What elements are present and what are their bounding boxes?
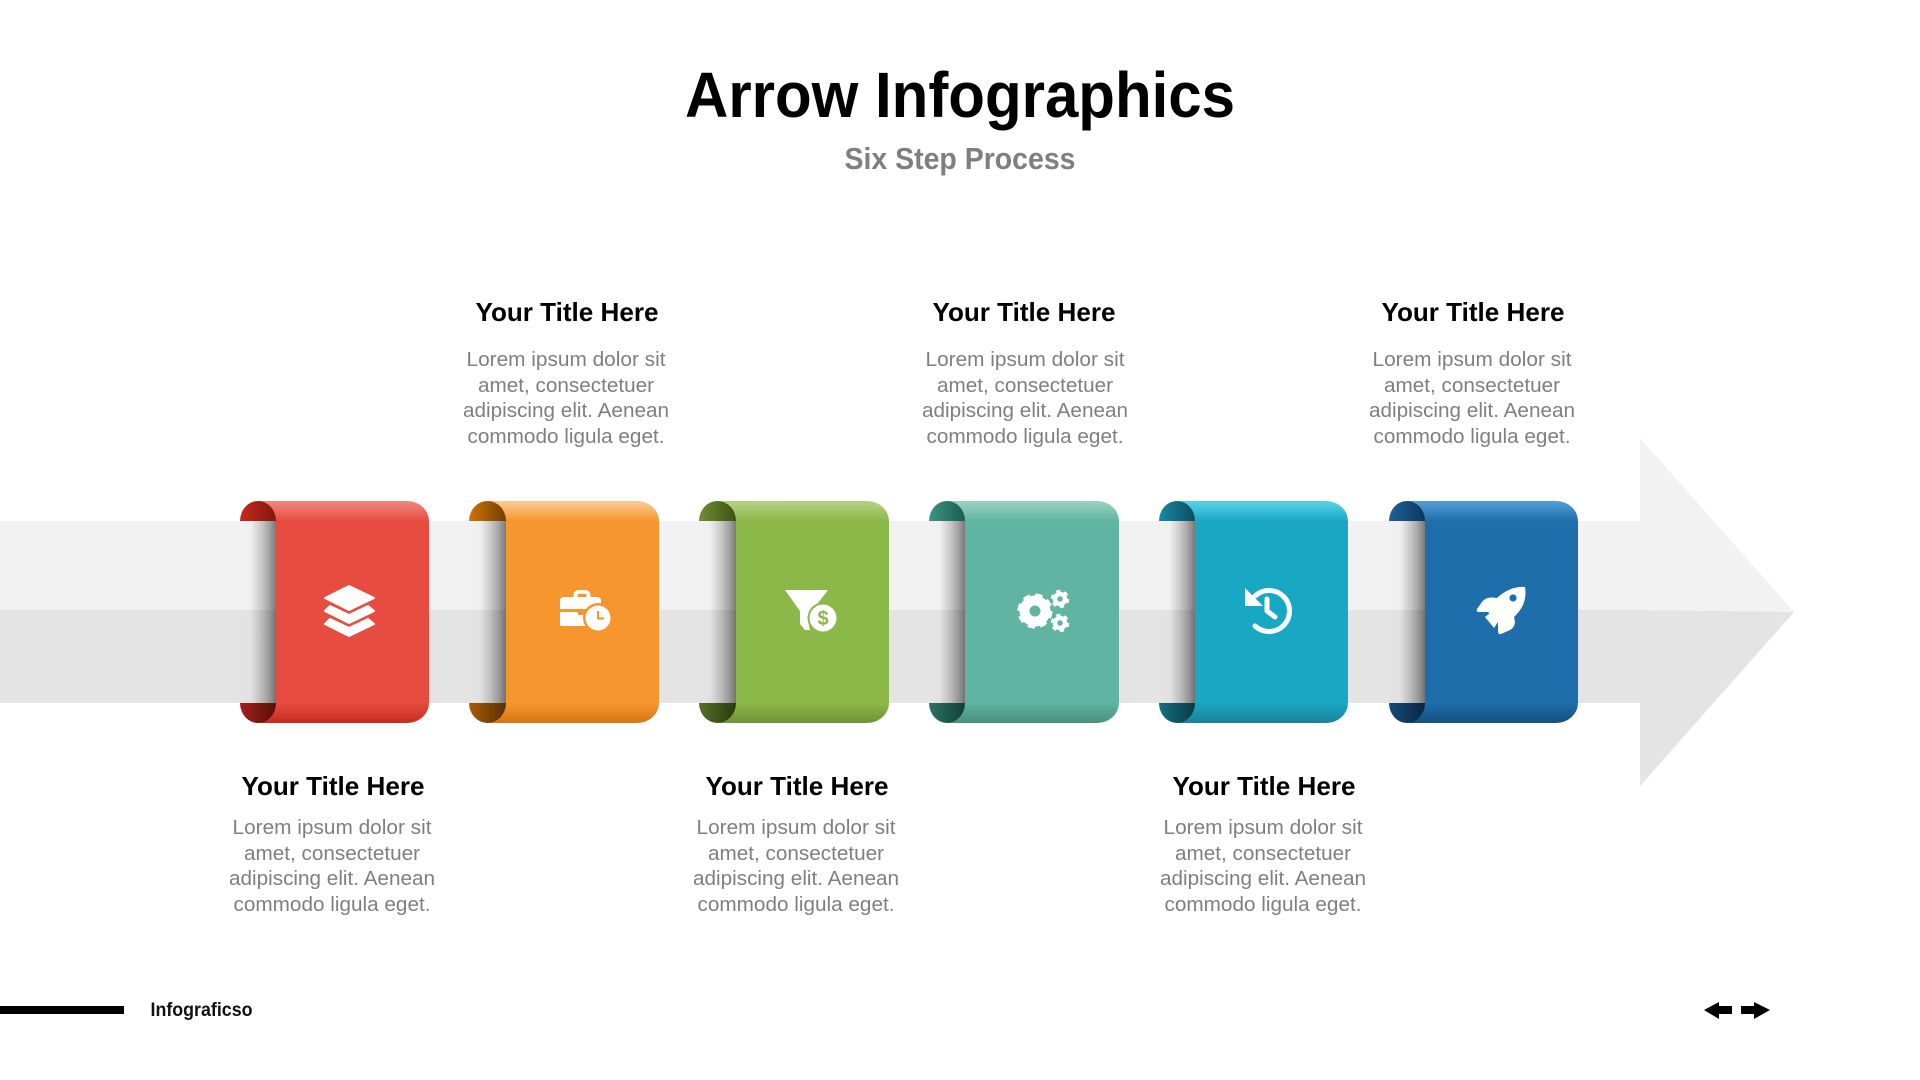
step 3 card: green (699, 501, 889, 723)
text block: step 5: commodo ligula eget. (1164, 894, 1362, 916)
text block: step 3: commodo ligula eget. (698, 894, 894, 916)
text block: step 2 (463, 297, 669, 448)
text block: step 6 (1369, 297, 1575, 448)
text block: step 1: amet, consectetuer (244, 843, 420, 865)
icon: gears (1020, 592, 1068, 630)
text block: step 5: amet, consectetuer (1175, 843, 1351, 865)
text block: step 2: Your Title Here (476, 297, 658, 327)
footer bar (0, 1006, 124, 1014)
step 2 card: orange (469, 501, 659, 723)
icon: history clock (1245, 588, 1289, 632)
text block: step 2: Lorem ipsum dolor sit (466, 349, 666, 371)
footer brand: Infograficso (150, 1000, 252, 1021)
text block: step 4: adipiscing elit. Aenean (922, 400, 1128, 422)
icon: funnel with dollar coin (785, 590, 838, 634)
text block: step 6: amet, consectetuer (1384, 375, 1560, 397)
text block: step 3 (693, 771, 899, 916)
title: Arrow Infographics (685, 59, 1235, 131)
big background arrow (0, 438, 1794, 786)
text block: step 1: adipiscing elit. Aenean (229, 868, 435, 890)
text block: step 5 (1160, 771, 1366, 916)
icon: previous arrow (1704, 1002, 1732, 1019)
icon: layers (325, 586, 374, 636)
step 5 card: cyan (1159, 501, 1348, 723)
text block: step 3: adipiscing elit. Aenean (693, 868, 899, 890)
text block: step 1: Your Title Here (242, 771, 424, 801)
text block: step 4: Your Title Here (932, 297, 1116, 327)
text block: step 1: Lorem ipsum dolor sit (232, 817, 432, 839)
text block: step 6: adipiscing elit. Aenean (1369, 400, 1575, 422)
icon: briefcase with clock (560, 592, 613, 633)
icon: rocket (1477, 587, 1526, 634)
text block: step 4: amet, consectetuer (937, 375, 1113, 397)
text block: step 3: Your Title Here (706, 771, 888, 801)
text block: step 6: commodo ligula eget. (1374, 426, 1570, 448)
text block: step 2: adipiscing elit. Aenean (463, 400, 669, 422)
subtitle: Six Step Process (844, 141, 1076, 176)
text block: step 6: Lorem ipsum dolor sit (1372, 349, 1572, 371)
step 6 card: blue (1389, 501, 1578, 723)
text block: step 1: commodo ligula eget. (234, 894, 430, 916)
step 1 card: red (240, 501, 429, 723)
text block: step 3: Lorem ipsum dolor sit (696, 817, 896, 839)
text block: step 2: commodo ligula eget. (468, 426, 664, 448)
step 4 card: teal (929, 501, 1119, 723)
text block: step 6: Your Title Here (1382, 297, 1564, 327)
text block: step 5: adipiscing elit. Aenean (1160, 868, 1366, 890)
text block: step 3: amet, consectetuer (708, 843, 884, 865)
icon: funnel with dollar coin: $ (817, 608, 829, 630)
icon: next arrow (1741, 1002, 1770, 1019)
text block: step 4: commodo ligula eget. (926, 426, 1124, 448)
text block: step 5: Your Title Here (1172, 771, 1356, 801)
text block: step 4 (922, 297, 1128, 448)
text block: step 2: amet, consectetuer (478, 375, 654, 397)
text block: step 1 (229, 771, 435, 916)
text block: step 5: Lorem ipsum dolor sit (1164, 817, 1363, 839)
text block: step 4: Lorem ipsum dolor sit (926, 349, 1125, 371)
